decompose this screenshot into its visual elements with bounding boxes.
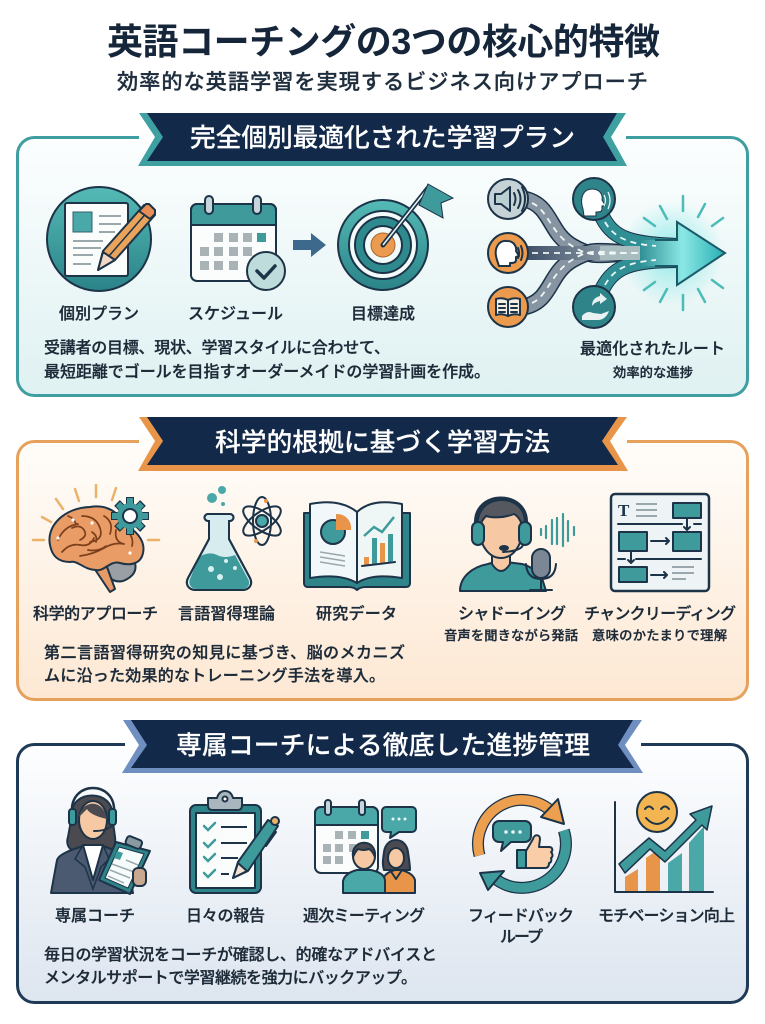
label: 目標達成 xyxy=(351,305,415,323)
panel: personalized plan xyxy=(18,113,748,396)
label: optimized route: 最適化されたルート xyxy=(580,340,725,358)
label: フィードバック xyxy=(468,907,574,925)
icon: headset person shadowing xyxy=(460,498,574,591)
label: チャンクリーディング xyxy=(584,604,736,623)
label: シャドーイング xyxy=(458,605,566,623)
panel: dedicated coach xyxy=(18,720,748,1002)
panel: scientific method xyxy=(18,417,748,700)
icon: chunk reading document xyxy=(611,494,709,591)
label: optimized route: 効率的な進捗 xyxy=(613,365,693,380)
arrow xyxy=(293,233,326,257)
icon: calendar xyxy=(191,196,285,290)
icon: weekly meeting xyxy=(315,800,416,893)
text block: メンタルサポートで学習継続を強力にバックアップ。 xyxy=(44,969,417,987)
label xyxy=(444,605,578,643)
label: 科学的アプローチ xyxy=(33,605,158,623)
label: ループ xyxy=(500,928,543,946)
panel 2 frame xyxy=(18,442,748,700)
banner 3 xyxy=(122,720,643,773)
text block xyxy=(44,338,490,381)
panel 1 frame xyxy=(18,138,748,396)
panel 3 frame xyxy=(18,744,748,1002)
banner 3: 専属コーチによる徹底した進捗管理 xyxy=(176,731,590,760)
label: 専属コーチ xyxy=(55,907,135,925)
banner 2: 科学的根拠に基づく学習方法 xyxy=(215,428,550,457)
icon: coach xyxy=(51,788,150,894)
icon: target with flag xyxy=(338,184,453,290)
icon: open book with data xyxy=(304,502,410,590)
banner 1 xyxy=(138,113,627,166)
icon: flask and atom xyxy=(187,486,285,590)
banner 1: 完全個別最適化された学習プラン xyxy=(190,124,575,152)
label: スケジュール xyxy=(188,305,283,323)
title: 英語コーチングの3つの核心的特徴 xyxy=(107,21,660,62)
label: optimized route xyxy=(580,340,725,380)
icon: daily report clipboard xyxy=(190,791,279,893)
icon: motivation chart xyxy=(615,792,713,892)
text block: 第二言語習得研究の知見に基づき、脳のメカニズ xyxy=(44,643,405,662)
icon: chunk reading document: T xyxy=(618,501,630,520)
banner 2 xyxy=(138,417,628,471)
label xyxy=(584,604,736,643)
icon: document and pencil xyxy=(47,187,155,291)
icon: feedback loop xyxy=(478,799,566,890)
text block: 最短距離でゴールを目指すオーダーメイドの学習計画を作成。 xyxy=(44,362,490,381)
text block xyxy=(44,945,437,987)
label xyxy=(468,907,574,946)
text block: 毎日の学習状況をコーチが確認し、的確なアドバイスと xyxy=(44,945,437,964)
label: 言語習得理論 xyxy=(178,605,275,623)
text block xyxy=(44,643,405,685)
text block: ムに沿った効果的なトレーニング手法を導入。 xyxy=(44,667,385,685)
label: 研究データ xyxy=(316,604,397,623)
label: 意味のかたまりで理解 xyxy=(592,627,727,643)
icon: brain and gear xyxy=(33,485,159,592)
subtitle: 効率的な英語学習を実現するビジネス向けアプローチ xyxy=(117,70,648,94)
text block: 受講者の目標、現状、学習スタイルに合わせて、 xyxy=(44,338,390,357)
label: モチベーション向上 xyxy=(598,907,735,925)
label: 音声を聞きながら発話 xyxy=(444,627,578,643)
label: 週次ミーティング xyxy=(303,907,425,925)
label: 個別プラン xyxy=(59,305,139,323)
label: 日々の報告 xyxy=(186,907,265,925)
icon: optimized route xyxy=(488,178,725,328)
